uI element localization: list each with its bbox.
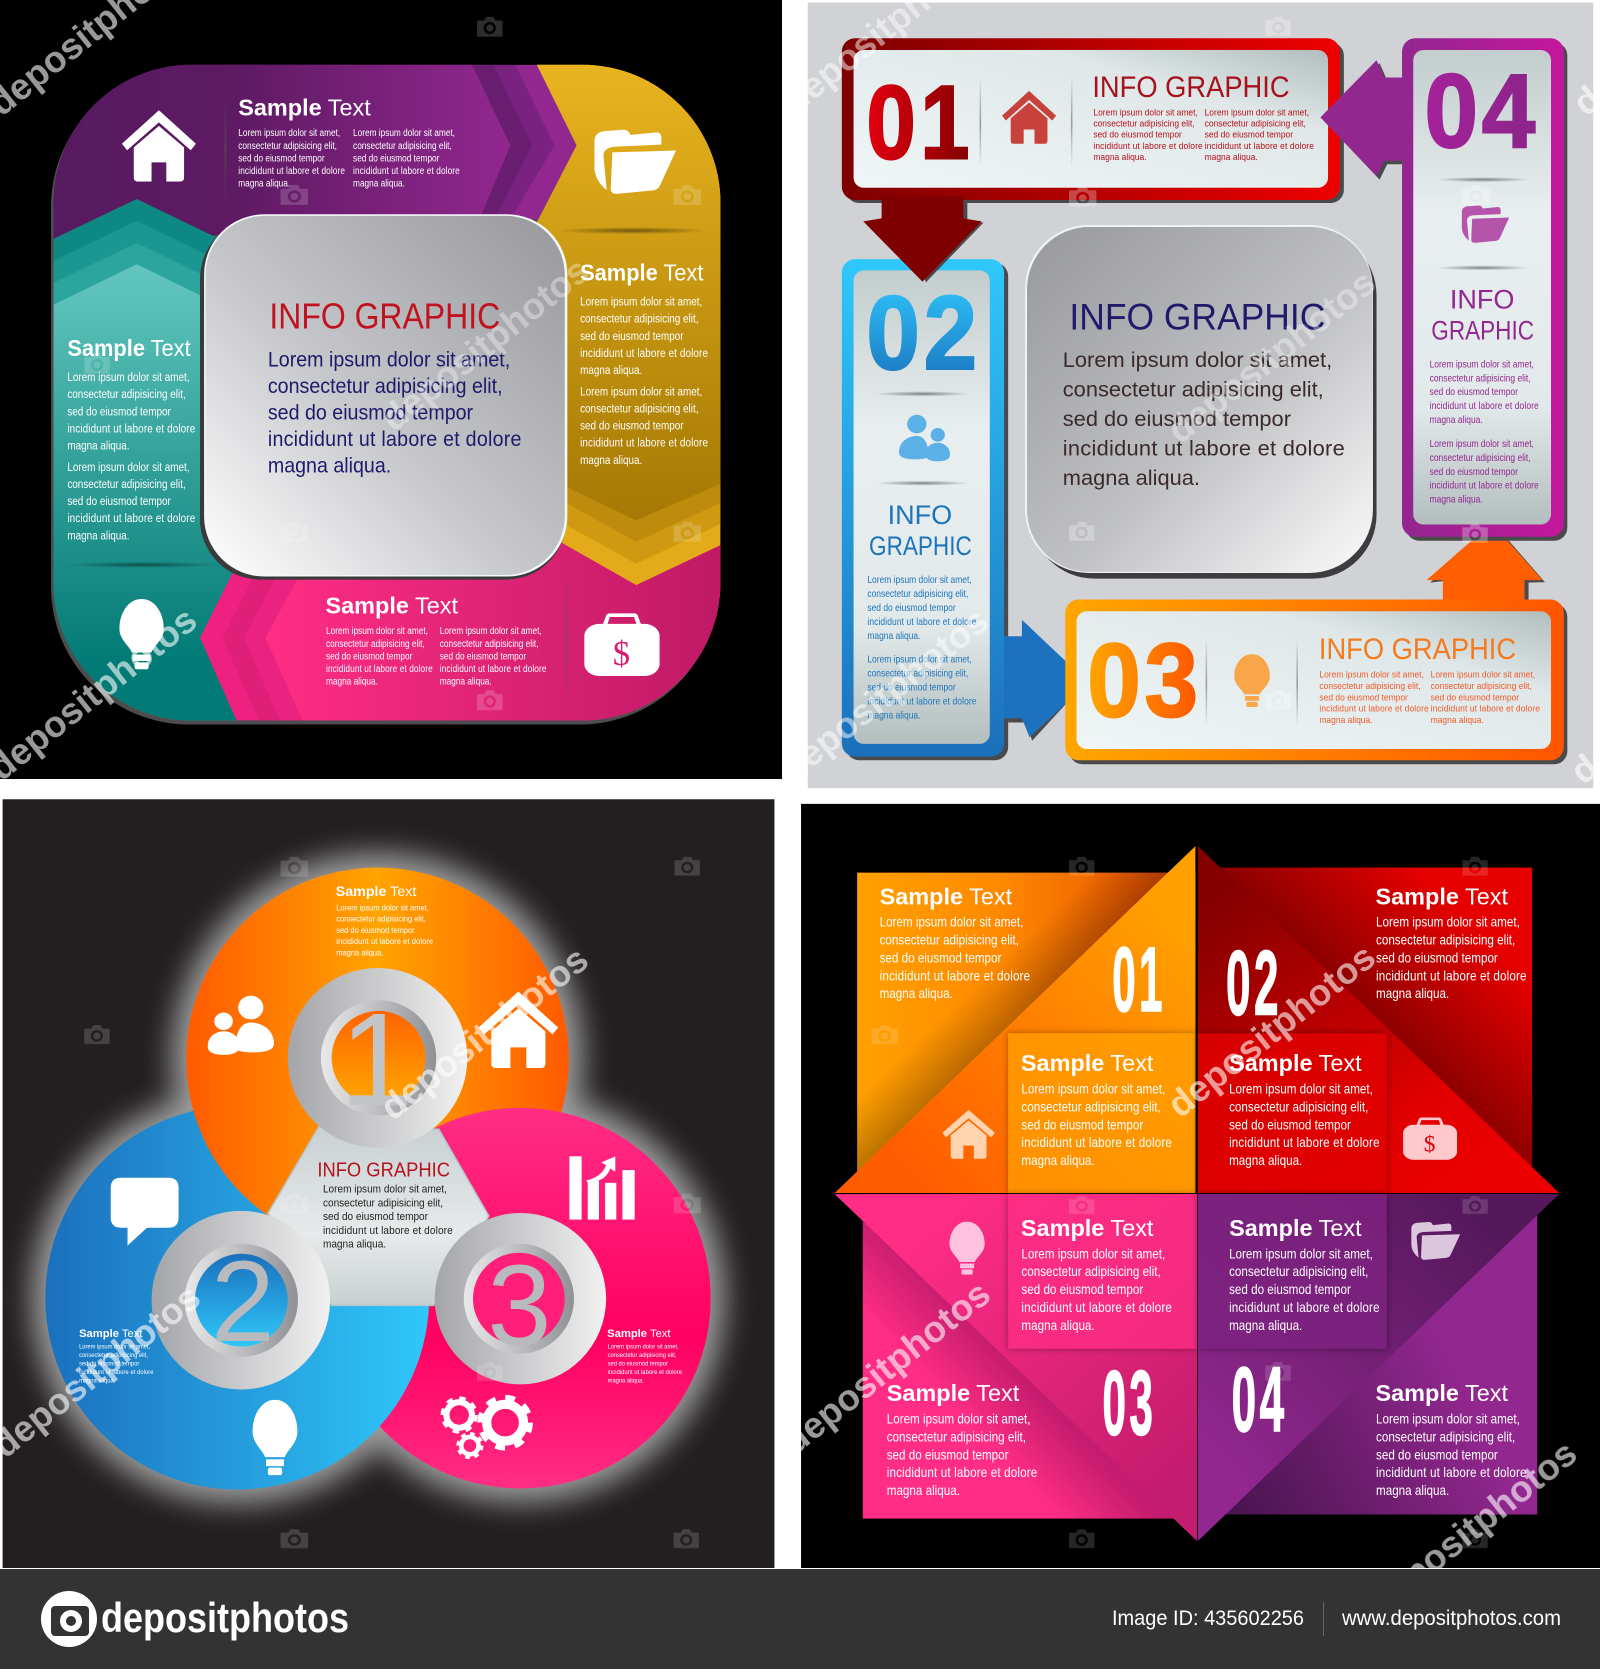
- icon: people: [208, 996, 274, 1055]
- watermarks: [774, 936, 1585, 1622]
- text: center body: magna aliqua.: [1063, 465, 1200, 490]
- heading 04: [1432, 290, 1534, 340]
- yellow text block: incididunt ut labore et dolore: [580, 347, 708, 360]
- text block: purple bottom: consectetur adipisicing elit,: [1376, 1429, 1515, 1445]
- text block: pink inner: magna aliqua.: [1021, 1317, 1095, 1333]
- text block 04: magna aliqua.: [1430, 414, 1483, 425]
- purple text block: Sample Text: [238, 94, 371, 120]
- logo: camera badge: [41, 1591, 97, 1647]
- yellow text block: Lorem ipsum dolor sit amet,: [580, 296, 702, 309]
- text block 04: incididunt ut labore et dolore: [1430, 480, 1539, 491]
- text block: orange inner: Sample Text: [1021, 1050, 1154, 1076]
- text block: pink inner: Lorem ipsum dolor sit amet,: [1021, 1245, 1165, 1262]
- quadrant: pink: [835, 1194, 1197, 1541]
- text block 02: sed do eiusmod tempor: [867, 602, 956, 613]
- text: orange circle: [336, 884, 433, 957]
- center card: [200, 214, 567, 580]
- text block: orange inner: [1021, 1050, 1172, 1168]
- text block 02: consectetur adipisicing elit,: [867, 668, 968, 679]
- icon: dollar case: [1403, 1118, 1457, 1160]
- teal text block: Sample Text: [67, 334, 191, 361]
- glow: [32, 853, 725, 1503]
- text block: red top: consectetur adipisicing elit,: [1376, 932, 1515, 948]
- text: center: magna aliqua.: [323, 1239, 386, 1251]
- text: blue circle: Lorem ipsum dolor sit amet,: [79, 1343, 150, 1351]
- icon: dollar case: [584, 613, 660, 676]
- text block: orange top: Lorem ipsum dolor sit amet,: [880, 914, 1023, 930]
- segment: pink: [200, 538, 724, 724]
- watermarks: depositphotos: [1160, 262, 1383, 451]
- text block 03: sed do eiusmod tempor: [1431, 692, 1519, 702]
- text: orange circle: magna aliqua.: [336, 948, 383, 957]
- arrow: purple to red: [1320, 60, 1404, 180]
- heading: info graphic: INFO GRAPHIC: [269, 297, 500, 337]
- text block 02: consectetur adipisicing elit,: [867, 588, 968, 599]
- text block 02: Lorem ipsum dolor sit amet,: [867, 654, 972, 665]
- text block: red inner: Lorem ipsum dolor sit amet,: [1229, 1081, 1373, 1097]
- heading 04: GRAPHIC: [1431, 317, 1534, 346]
- icon: light bulb: [119, 599, 164, 669]
- purple text block: consectetur adipisicing elit,: [238, 140, 337, 151]
- teal text block: Lorem ipsum dolor sit amet,: [67, 461, 190, 474]
- icon: folder: [1411, 1222, 1460, 1260]
- text block 01: incididunt ut labore et dolore: [1205, 141, 1314, 151]
- watermarks: [0, 0, 597, 788]
- text block: orange inner: magna aliqua.: [1021, 1152, 1095, 1168]
- text: pink circle: Sample Text: [607, 1328, 671, 1340]
- heading: center: INFO GRAPHIC: [317, 1159, 450, 1182]
- image id: Image ID: 435602256: [1112, 1607, 1304, 1630]
- text block: purple bottom: [1376, 1380, 1527, 1498]
- text block 01: Lorem ipsum dolor sit amet,: [1093, 107, 1198, 117]
- text block: purple bottom: incididunt ut labore et dolore: [1376, 1464, 1527, 1480]
- text block 03: magna aliqua.: [1431, 715, 1484, 725]
- watermarks: depositphotos: [372, 938, 596, 1128]
- icon: house: [479, 992, 558, 1068]
- icon: speech bubble: [111, 1178, 179, 1246]
- teal text block: consectetur adipisicing elit,: [67, 478, 186, 491]
- frame 02 blue: [842, 259, 1008, 760]
- site url: www.depositphotos.com: [1341, 1607, 1561, 1630]
- text block 04: [1430, 359, 1539, 505]
- icon: house: [1002, 91, 1056, 144]
- heading 02: [870, 505, 971, 556]
- teal text block: magna aliqua.: [67, 529, 130, 543]
- text: pink circle: magna aliqua.: [608, 1377, 644, 1385]
- text: center body: sed do eiusmod tempor: [1063, 406, 1291, 431]
- quadrant: orange: [835, 846, 1195, 1193]
- text: center body: sed do eiusmod tempor: [268, 401, 473, 425]
- text block: red top: Lorem ipsum dolor sit amet,: [1376, 914, 1520, 930]
- text: orange circle: Sample Text: [336, 884, 416, 900]
- text block: red top: sed do eiusmod tempor: [1376, 949, 1498, 966]
- text block: pink bottom: sed do eiusmod tempor: [887, 1446, 1009, 1463]
- yellow text block: Sample Text: [580, 259, 704, 286]
- text block: red inner: [1229, 1050, 1380, 1168]
- text: blue circle: [79, 1328, 154, 1385]
- text block: red top: magna aliqua.: [1376, 985, 1449, 1001]
- text block 01: magna aliqua.: [1093, 152, 1147, 162]
- purple text block: sed do eiusmod tempor: [353, 153, 439, 164]
- watermarks: [772, 0, 1600, 792]
- number 01: 01: [1112, 929, 1166, 1031]
- text block: red top: [1376, 883, 1527, 1001]
- segment: purple: [48, 65, 577, 245]
- text block: pink bottom: consectetur adipisicing elit,: [887, 1429, 1026, 1445]
- ring 2: [152, 1211, 330, 1389]
- text block: orange top: [880, 883, 1030, 1001]
- icon: dollar case: $: [1424, 1132, 1435, 1158]
- center card: [1025, 225, 1377, 579]
- text block: red inner: incididunt ut labore et dolore: [1229, 1134, 1380, 1150]
- ring 3: [435, 1213, 606, 1384]
- text block 01: incididunt ut labore et dolore: [1093, 141, 1203, 151]
- text block: red inner: sed do eiusmod tempor: [1229, 1116, 1352, 1133]
- text block: red inner: consectetur adipisicing elit,: [1229, 1098, 1368, 1115]
- yellow text block: sed do eiusmod tempor: [580, 420, 684, 433]
- quadrant: purple: [1198, 1194, 1559, 1541]
- text block: purple bottom: magna aliqua.: [1376, 1482, 1449, 1498]
- teal text block: incididunt ut labore et dolore: [67, 512, 195, 525]
- icon: house: [942, 1110, 995, 1159]
- text: blue circle: magna aliqua.: [79, 1377, 116, 1385]
- icon: bulb: [253, 1400, 297, 1475]
- text block: pink bottom: Sample Text: [887, 1380, 1020, 1406]
- purple text block: incididunt ut labore et dolore: [238, 165, 345, 176]
- yellow text block: sed do eiusmod tempor: [580, 330, 684, 343]
- text block: orange inner: sed do eiusmod tempor: [1021, 1116, 1144, 1133]
- text block: purple bottom: Sample Text: [1376, 1380, 1509, 1406]
- heading 02: GRAPHIC: [869, 532, 972, 562]
- teal text block: sed do eiusmod tempor: [67, 495, 171, 508]
- text block 04: sed do eiusmod tempor: [1430, 466, 1518, 477]
- purple text block: incididunt ut labore et dolore: [353, 165, 460, 176]
- text: orange circle: sed do eiusmod tempor: [336, 926, 415, 935]
- text block: purple inner: [1229, 1215, 1380, 1333]
- icon: bar chart: [569, 1156, 635, 1220]
- text block: pink bottom: [887, 1380, 1037, 1498]
- frame 04 purple: [1402, 38, 1567, 541]
- text block 03: [1319, 669, 1540, 725]
- text: center body: Lorem ipsum dolor sit amet,: [1063, 347, 1332, 372]
- text block: pink inner: Sample Text: [1021, 1215, 1154, 1241]
- yellow text block: magna aliqua.: [580, 454, 642, 467]
- number 03: 03: [1103, 1352, 1156, 1455]
- text block: orange top: incididunt ut labore et dolore: [880, 967, 1030, 984]
- purple text block: Lorem ipsum dolor sit amet,: [238, 128, 340, 138]
- panel: origami squares infographic: [774, 804, 1600, 1622]
- watermarks: [0, 938, 596, 1466]
- text block 01: consectetur adipisicing elit,: [1205, 118, 1306, 129]
- text block: purple bottom: Lorem ipsum dolor sit amet,: [1376, 1411, 1520, 1427]
- text: center body: Lorem ipsum dolor sit amet,: [268, 348, 510, 372]
- text: pink circle: Lorem ipsum dolor sit amet,: [608, 1343, 679, 1351]
- text block: red inner: Sample Text: [1229, 1050, 1362, 1076]
- text: center body: consectetur adipisicing elit,: [268, 374, 503, 398]
- text block: pink bottom: Lorem ipsum dolor sit amet,: [887, 1411, 1031, 1427]
- text block 04: incididunt ut labore et dolore: [1430, 400, 1539, 411]
- text block 01: sed do eiusmod tempor: [1205, 129, 1293, 140]
- pink text block: magna aliqua.: [440, 676, 492, 687]
- ring 1: [288, 968, 467, 1148]
- pink text block: consectetur adipisicing elit,: [440, 638, 539, 649]
- text: pink circle: [607, 1328, 683, 1385]
- text: center: sed do eiusmod tempor: [323, 1212, 429, 1223]
- watermarks: depositphotos: [1361, 1432, 1585, 1622]
- pink text block: sed do eiusmod tempor: [440, 651, 526, 662]
- text block 03: Lorem ipsum dolor sit amet,: [1319, 669, 1424, 680]
- pink text block: Lorem ipsum dolor sit amet,: [440, 626, 542, 636]
- text: center body: incididunt ut labore et dolore: [1063, 436, 1345, 461]
- quadrant: red: [1198, 846, 1559, 1193]
- text block: orange top: magna aliqua.: [880, 985, 953, 1001]
- yellow text block: [580, 259, 708, 467]
- teal text block: consectetur adipisicing elit,: [67, 388, 186, 402]
- text block 02: incididunt ut labore et dolore: [867, 616, 977, 627]
- heading 04: INFO: [1450, 285, 1514, 315]
- text block: purple inner: consectetur adipisicing elit,: [1229, 1263, 1368, 1279]
- teal text block: [67, 334, 195, 543]
- heading 01: INFO GRAPHIC: [1092, 71, 1290, 104]
- text block 02: Lorem ipsum dolor sit amet,: [867, 574, 972, 585]
- circle: orange: [186, 868, 569, 1250]
- text block: purple inner: Lorem ipsum dolor sit amet,: [1229, 1245, 1373, 1262]
- watermarks: depositphotos: [373, 249, 597, 439]
- icon: bulb: [1234, 654, 1270, 707]
- number 01: 01: [866, 64, 974, 181]
- text block 02: magna aliqua.: [867, 710, 920, 721]
- panel: three circles infographic: [0, 799, 774, 1568]
- text block 04: sed do eiusmod tempor: [1430, 386, 1518, 397]
- teal text block: incididunt ut labore et dolore: [67, 423, 195, 436]
- text block 02: sed do eiusmod tempor: [867, 682, 956, 693]
- text: center body: incididunt ut labore et dolore: [268, 427, 522, 451]
- pink text block: [326, 592, 547, 687]
- purple text block: [238, 94, 460, 189]
- purple text block: magna aliqua.: [238, 178, 290, 189]
- teal text block: sed do eiusmod tempor: [67, 405, 171, 419]
- icon: bulb: [949, 1222, 985, 1275]
- text block: red top: incididunt ut labore et dolore: [1376, 967, 1527, 984]
- purple text block: consectetur adipisicing elit,: [353, 140, 452, 151]
- text block: pink inner: consectetur adipisicing elit,: [1021, 1263, 1161, 1279]
- text block: purple inner: sed do eiusmod tempor: [1229, 1281, 1352, 1297]
- text: orange circle: incididunt ut labore et dolore: [336, 937, 433, 946]
- pink text block: consectetur adipisicing elit,: [326, 638, 425, 649]
- pink text block: Lorem ipsum dolor sit amet,: [326, 626, 428, 636]
- text block: pink bottom: magna aliqua.: [887, 1482, 960, 1498]
- text block: orange inner: consectetur adipisicing elit,: [1021, 1098, 1161, 1115]
- panel: rounded square infographic: [0, 0, 782, 788]
- text: blue circle: sed do eiusmod tempor: [79, 1360, 139, 1368]
- watermarks: depositphotos: [774, 1273, 998, 1462]
- text: pink circle: sed do eiusmod tempor: [608, 1360, 668, 1368]
- center triangle: [268, 1127, 489, 1305]
- text block 03: incididunt ut labore et dolore: [1431, 703, 1540, 714]
- text block 03: consectetur adipisicing elit,: [1319, 681, 1421, 691]
- text block 04: Lorem ipsum dolor sit amet,: [1430, 359, 1534, 370]
- yellow text block: consectetur adipisicing elit,: [580, 313, 698, 326]
- text: center: consectetur adipisicing elit,: [323, 1198, 443, 1209]
- text: center body: consectetur adipisicing elit,: [1063, 377, 1324, 401]
- text block: pink inner: incididunt ut labore et dolore: [1021, 1299, 1172, 1315]
- segment: teal: [48, 199, 245, 724]
- number 02: 02: [866, 275, 981, 392]
- text block: purple inner: magna aliqua.: [1229, 1317, 1302, 1333]
- number 02: 02: [1226, 933, 1282, 1035]
- text block: orange inner: incididunt ut labore et dolore: [1021, 1134, 1172, 1150]
- frame 01 red: [842, 38, 1344, 283]
- text block 04: Lorem ipsum dolor sit amet,: [1430, 438, 1534, 449]
- icon: folder: [1462, 205, 1509, 243]
- text: center body: magna aliqua.: [268, 454, 391, 478]
- text block: orange top: Sample Text: [880, 883, 1013, 909]
- heading: center: INFO GRAPHIC: [1069, 296, 1325, 338]
- icon: gears: [443, 1398, 530, 1457]
- icon: dollar case: $: [613, 634, 630, 673]
- purple text block: magna aliqua.: [353, 178, 405, 189]
- text block: red top: Sample Text: [1376, 883, 1509, 909]
- pink text block: incididunt ut labore et dolore: [440, 663, 547, 674]
- circle: pink: [330, 1108, 711, 1488]
- text: orange circle: Lorem ipsum dolor sit amet,: [336, 903, 429, 912]
- logo wordmark: depositphotos: [101, 1594, 349, 1641]
- text block: purple inner: incididunt ut labore et dolore: [1229, 1299, 1380, 1315]
- pink text block: incididunt ut labore et dolore: [326, 663, 433, 674]
- text: blue circle: Sample Text: [79, 1328, 143, 1340]
- text block: purple bottom: sed do eiusmod tempor: [1376, 1446, 1498, 1463]
- number 04: 04: [1424, 53, 1539, 170]
- text: pink circle: incididunt ut labore et dolore: [608, 1369, 683, 1376]
- text block 04: consectetur adipisicing elit,: [1430, 373, 1531, 383]
- yellow text block: incididunt ut labore et dolore: [580, 437, 708, 450]
- ring 2: 2: [211, 1238, 275, 1366]
- text block 03: consectetur adipisicing elit,: [1431, 681, 1532, 691]
- text block 04: consectetur adipisicing elit,: [1430, 452, 1531, 463]
- text block 02: magna aliqua.: [867, 630, 920, 641]
- watermarks: depositphotos: [1160, 936, 1383, 1125]
- icon: people: [899, 415, 950, 461]
- text block: pink bottom: incididunt ut labore et dolore: [887, 1464, 1037, 1480]
- text block 03: incididunt ut labore et dolore: [1319, 703, 1429, 714]
- text block 01: sed do eiusmod tempor: [1093, 129, 1182, 140]
- text block: pink inner: sed do eiusmod tempor: [1021, 1281, 1144, 1297]
- yellow text block: consectetur adipisicing elit,: [580, 403, 698, 416]
- purple text block: sed do eiusmod tempor: [238, 153, 325, 164]
- purple text block: Lorem ipsum dolor sit amet,: [353, 128, 455, 138]
- text block 03: sed do eiusmod tempor: [1319, 692, 1408, 702]
- segment: yellow: [536, 65, 724, 585]
- panel: numbered frames infographic: [772, 0, 1600, 792]
- text block 01: consectetur adipisicing elit,: [1093, 118, 1195, 129]
- text: pink circle: consectetur adipisicing elit,: [608, 1352, 677, 1359]
- watermarks: depositphotos: [772, 600, 996, 789]
- text block 01: magna aliqua.: [1205, 152, 1258, 162]
- heading 02: INFO: [888, 500, 952, 530]
- text: center: Lorem ipsum dolor sit amet,: [323, 1184, 447, 1196]
- text block 02: incididunt ut labore et dolore: [867, 696, 977, 707]
- icon: house: [122, 110, 196, 182]
- text: orange circle: consectetur adipisicing elit,: [336, 914, 426, 924]
- circle: blue: [45, 1106, 429, 1489]
- teal text block: Lorem ipsum dolor sit amet,: [67, 371, 190, 384]
- text block 04: magna aliqua.: [1430, 494, 1483, 505]
- text block: pink inner: [1021, 1215, 1172, 1333]
- text block: purple inner: Sample Text: [1229, 1215, 1362, 1241]
- pink text block: magna aliqua.: [326, 676, 378, 687]
- pink text block: sed do eiusmod tempor: [326, 651, 412, 662]
- text block: red inner: magna aliqua.: [1229, 1152, 1302, 1168]
- text block: orange top: sed do eiusmod tempor: [880, 949, 1002, 966]
- text block 01: Lorem ipsum dolor sit amet,: [1205, 107, 1309, 117]
- yellow text block: Lorem ipsum dolor sit amet,: [580, 386, 702, 399]
- arrow: blue to orange: [1004, 620, 1070, 741]
- pink text block: Sample Text: [326, 592, 459, 618]
- icon: folder: [594, 130, 676, 194]
- ring 3: 3: [487, 1242, 551, 1370]
- footer bar: [0, 1569, 1600, 1669]
- teal text block: magna aliqua.: [67, 440, 130, 453]
- text block: orange inner: Lorem ipsum dolor sit amet,: [1021, 1081, 1165, 1097]
- text: center: incididunt ut labore et dolore: [323, 1226, 453, 1237]
- text: blue circle: incididunt ut labore et dolore: [79, 1369, 154, 1376]
- frame 03 orange: [1065, 537, 1567, 764]
- text: blue circle: consectetur adipisicing elit,: [79, 1352, 148, 1359]
- text block 03: magna aliqua.: [1319, 715, 1373, 725]
- text block 03: Lorem ipsum dolor sit amet,: [1431, 669, 1535, 680]
- heading 03: INFO GRAPHIC: [1319, 633, 1516, 666]
- yellow text block: magna aliqua.: [580, 364, 642, 377]
- number 04: 04: [1232, 1349, 1288, 1451]
- text block: orange top: consectetur adipisicing elit,: [880, 932, 1019, 948]
- text block 01: [1093, 107, 1314, 162]
- text block 02: [867, 574, 977, 721]
- ring 1: 1: [340, 986, 413, 1134]
- number 03: 03: [1087, 623, 1202, 739]
